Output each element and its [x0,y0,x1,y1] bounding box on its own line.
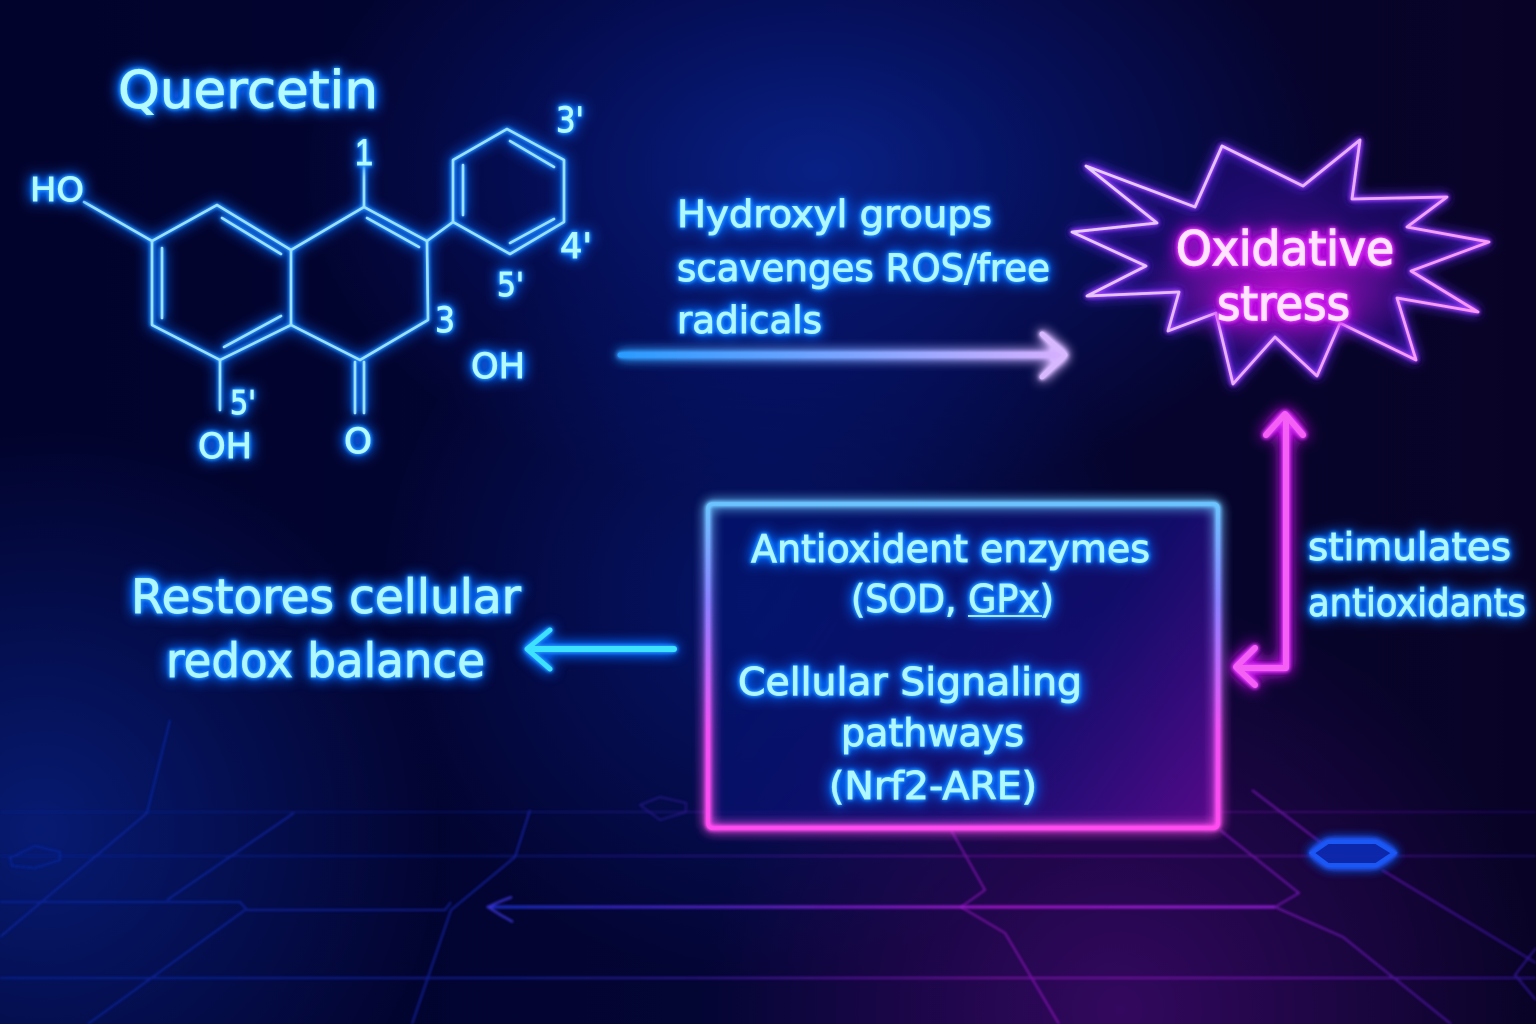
background arrow [487,897,1275,922]
oxidative stress label [1176,222,1394,332]
panel text: Cellular Signaling [738,660,1082,704]
text: hydroxyl groups scavenge ROS [677,193,1050,342]
text: restores cellular redox balance [131,570,522,689]
molecule atom and position labels: 1 [355,132,373,173]
molecule atom and position labels: OH [198,427,252,467]
title: Quercetin: Quercetin [118,61,378,121]
molecule atom and position labels: 3' [556,101,584,141]
text: hydroxyl groups scavenge ROS: Hydroxyl groups [677,193,992,236]
oxidative stress label: Oxidative [1176,222,1394,277]
quercetin molecule structure [84,129,564,413]
background circuit grid [0,720,1536,1024]
arrow: to redox balance [527,630,674,669]
text: hydroxyl groups scavenge ROS: radicals [677,299,822,342]
molecule atom and position labels: 5' [230,383,256,422]
oxidative stress label: stress [1217,277,1350,332]
panel text [738,527,1150,808]
left ring [152,205,291,360]
panel: antioxidant enzymes and signaling [708,504,1218,828]
molecule atom and position labels: 5' [497,265,524,304]
molecule atom and position labels: 3 [435,301,455,341]
arrow: quercetin to oxidative stress [620,334,1065,377]
panel text: Antioxident enzymes [751,527,1150,571]
panel text: pathways [841,711,1024,755]
text: restores cellular redox balance: redox balance [166,634,485,689]
text: stimulates antioxidants [1308,525,1526,625]
panel text: (Nrf2-ARE) [829,764,1037,808]
panel text: (SOD, GPx) [851,577,1054,621]
double-headed arrow: stimulates antioxidants [1236,414,1303,685]
molecule atom and position labels: OH [471,347,525,387]
molecule atom and position labels: HO [30,170,84,209]
molecule atom and position labels: O [344,422,372,462]
molecule atom and position labels: 4' [560,227,592,267]
text: stimulates antioxidants: antioxidants [1308,581,1526,625]
middle ring [291,207,428,360]
substituent bonds [84,166,364,413]
molecule atom and position labels [30,101,592,467]
text: stimulates antioxidants: stimulates [1308,525,1511,569]
glowing hexagon node [1312,842,1394,865]
text: restores cellular redox balance: Restores cellular [131,570,522,625]
text: hydroxyl groups scavenge ROS: scavenges ROS/free [677,247,1050,290]
phenyl ring [427,129,564,254]
oxidative stress starburst [1072,140,1489,384]
